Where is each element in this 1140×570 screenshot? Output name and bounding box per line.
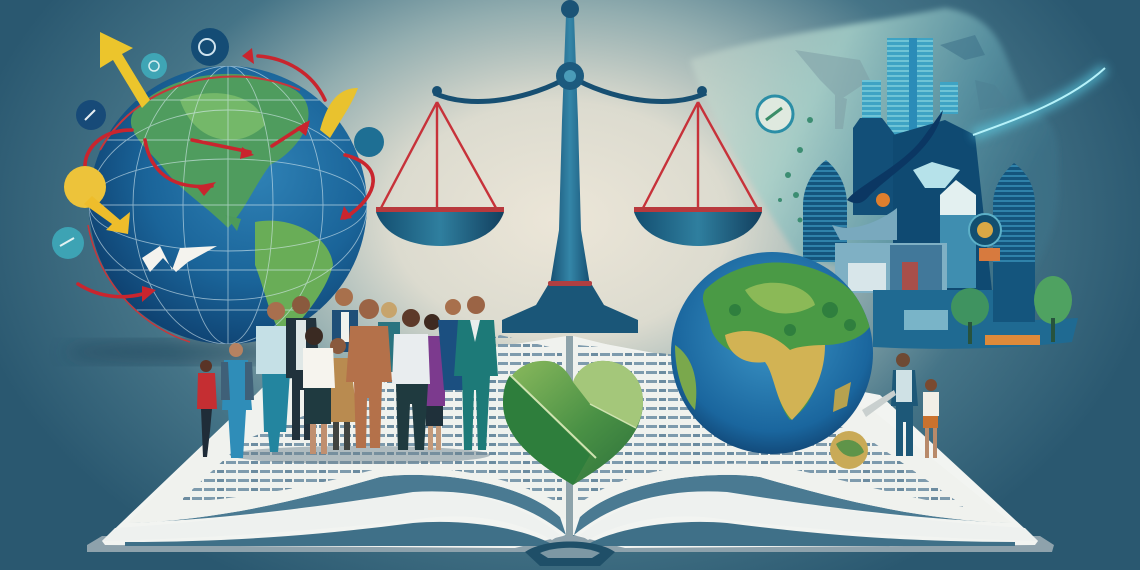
small globe on book: [830, 431, 868, 469]
person tan coat: [326, 338, 358, 450]
right pan: [634, 102, 762, 246]
person brown suit: [346, 299, 392, 448]
scales of justice: [376, 0, 762, 333]
person far left red: [197, 360, 217, 457]
pagoda roof and pale buildings: [832, 208, 897, 240]
person woman white: [303, 327, 335, 454]
spine clasp: [525, 542, 615, 566]
trees: [951, 288, 989, 326]
person white blouse: [392, 309, 430, 450]
person purple: [424, 314, 445, 450]
base: [873, 290, 1078, 349]
group of people: [197, 288, 498, 464]
left globe: [52, 28, 384, 344]
city: [757, 38, 1105, 349]
shadows: [65, 340, 315, 364]
round emblem and pot: [969, 214, 1001, 246]
faded world map behind city: [690, 8, 1059, 290]
open book: [87, 335, 1054, 566]
book cover base: [87, 536, 1054, 552]
person white shirt: [256, 302, 296, 452]
diamond roof: [913, 162, 960, 188]
tall towers: [887, 38, 933, 143]
couple beside right globe: [862, 353, 939, 458]
left page stack: [102, 338, 567, 548]
shadow on page: [230, 446, 490, 464]
person blue jacket: [438, 299, 466, 390]
right globe: [671, 252, 873, 454]
person green suit: [454, 296, 498, 450]
domes: [803, 160, 847, 262]
right page stack: [573, 338, 1038, 548]
glowing streak: [973, 68, 1105, 135]
red ring: [100, 76, 300, 150]
grid: [89, 66, 367, 344]
person dark suit: [286, 296, 320, 440]
left pan: [376, 102, 504, 246]
yellow arrows: [100, 32, 150, 108]
continents: [131, 74, 309, 228]
person back suit: [332, 288, 358, 352]
dark core: [853, 118, 895, 215]
heart: [503, 361, 643, 485]
clock icon and leaves: [757, 96, 793, 132]
continents: [703, 263, 872, 420]
red arrows: [78, 56, 373, 297]
orange badge: [876, 193, 890, 207]
person teal behind: [378, 302, 400, 372]
page text: [178, 335, 562, 505]
person blue suit: [221, 343, 254, 458]
round icons: [191, 28, 229, 66]
